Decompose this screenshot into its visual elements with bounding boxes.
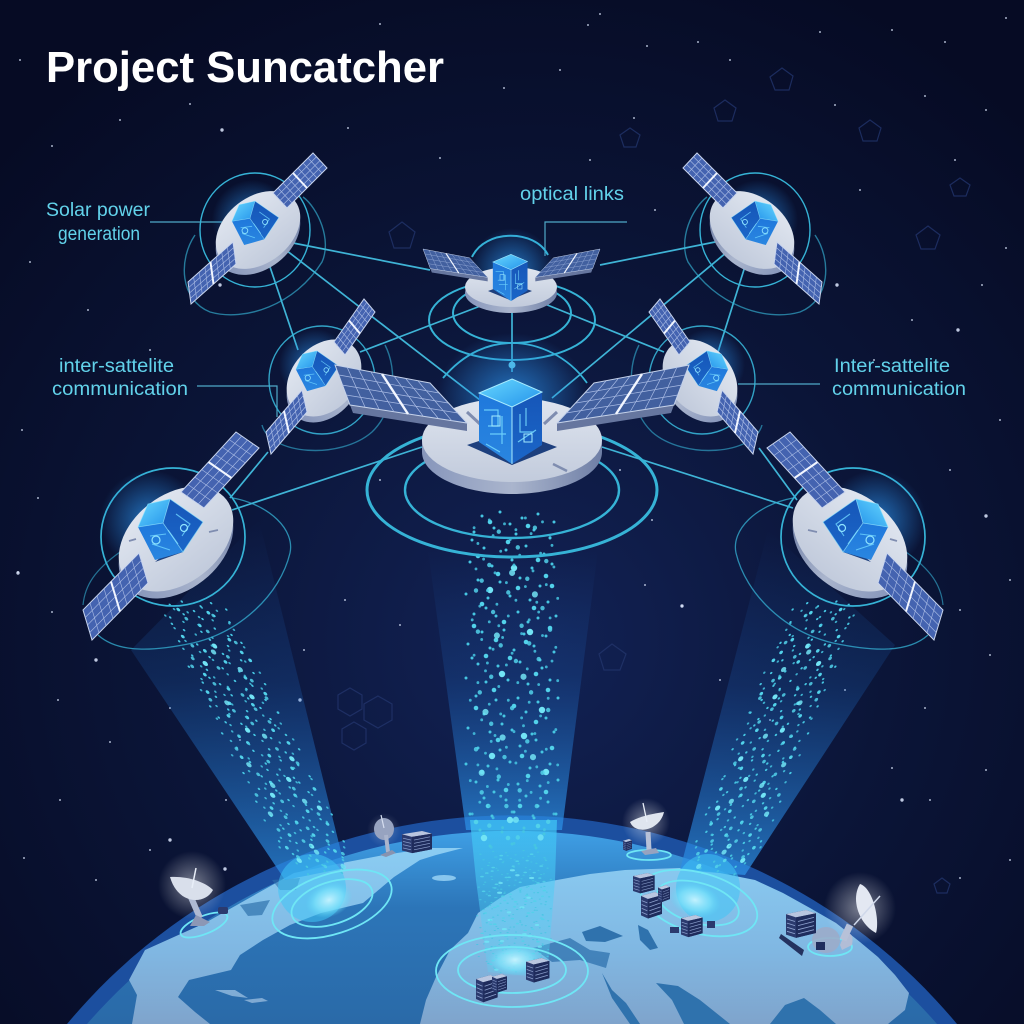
satellite: centre main — [335, 333, 689, 494]
servers: right cluster — [633, 873, 715, 937]
ground station rings and hot spots — [177, 850, 852, 1007]
particle stream: right — [682, 602, 862, 874]
label: inter-satellite communication left: inter-sattelite — [59, 356, 174, 377]
satellite: top left — [184, 153, 327, 315]
ocean — [87, 831, 937, 1024]
label: inter-satellite communication right: Inter-sattelite — [834, 356, 950, 377]
satellite: bottom left — [83, 432, 291, 649]
particle stream: left — [156, 602, 361, 874]
callout leader lines — [150, 222, 820, 417]
label: inter-satellite communication right: communication — [832, 379, 966, 400]
satellite: bottom right — [735, 432, 943, 649]
dish: upper left — [367, 813, 401, 857]
servers: upper left — [402, 831, 432, 853]
servers: right — [779, 910, 825, 956]
small server: left — [218, 907, 228, 914]
atmosphere ring — [67, 815, 957, 1024]
particle stream: centre — [466, 512, 558, 973]
dish: right — [812, 872, 896, 953]
label: solar power generation: Solar power — [46, 200, 151, 221]
title: Project Suncatcher — [46, 43, 444, 92]
satellite: centre top — [423, 228, 600, 313]
label: optical links: optical links — [520, 184, 624, 205]
data beam: left — [131, 520, 346, 922]
data beam: centre — [428, 550, 598, 978]
satellite: mid right — [631, 299, 762, 454]
signal rings: top satellite — [429, 236, 595, 360]
optical links network — [230, 240, 797, 510]
label: inter-satellite communication left: communication — [52, 379, 188, 400]
link node dot — [508, 362, 516, 368]
inland seas and ocean cuts — [240, 878, 836, 1024]
data beam: right — [676, 530, 895, 922]
servers: centre — [476, 958, 549, 1002]
faint hexagon outlines — [338, 68, 970, 893]
signal rings: central satellite — [367, 343, 657, 557]
continents — [129, 848, 909, 1024]
globe — [67, 815, 957, 1024]
satellite: mid left — [262, 299, 393, 454]
servers: upper right — [623, 839, 632, 851]
dish: upper right — [622, 798, 670, 855]
dish: left — [158, 851, 226, 926]
satellite: top right — [683, 153, 826, 315]
label: solar power generation: generation — [58, 224, 140, 245]
